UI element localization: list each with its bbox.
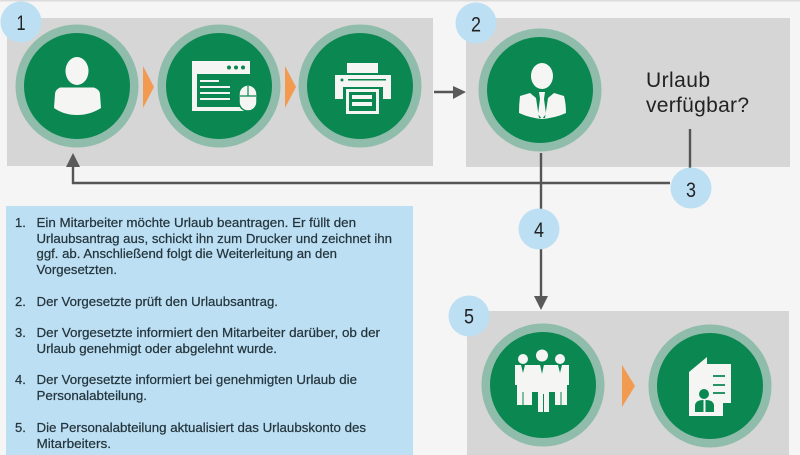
badge 2 <box>456 2 496 44</box>
text block: numbered steps: Der Vorgesetzte informiert den Mitarbeiter darüber, ob der <box>36 325 381 340</box>
badge 1 <box>0 2 42 42</box>
text block: numbered steps: Der Vorgesetzte prüft den Urlaubsantrag. <box>36 294 278 309</box>
connector: question to badge 3 <box>689 129 691 170</box>
text block: numbered steps <box>15 215 392 451</box>
icon: printer <box>298 24 422 148</box>
panel: step 2 background <box>466 18 790 167</box>
panel: description list background <box>6 206 413 455</box>
connector: supervisor to badge 4 <box>540 153 542 210</box>
arrow: feedback from step 3 to step 1 <box>66 153 670 183</box>
text block: numbered steps: Ein Mitarbeiter möchte Urlaub beantragen. Er füllt den <box>36 215 356 230</box>
badge 3: 3 <box>686 179 696 202</box>
text block: numbered steps: Vorgesetzten. <box>36 262 117 277</box>
badge 2: 2 <box>471 14 481 36</box>
text block: numbered steps: Personalabteilung. <box>36 388 147 403</box>
text block: numbered steps: Urlaubsantrag aus, schickt ihn zum Drucker und zeichnet ihn <box>36 231 392 246</box>
question text <box>646 69 749 117</box>
icon: staff group <box>482 324 604 446</box>
text block: numbered steps: 2. <box>15 294 26 309</box>
icon: employee <box>16 24 138 148</box>
arrow: badge 4 to step 5 <box>534 248 548 310</box>
text block: numbered steps: Urlaub genehmigt oder abgelehnt wurde. <box>36 341 277 356</box>
question text: Urlaub <box>646 69 710 92</box>
icon: form on screen with mouse <box>158 24 280 148</box>
arrow: staff to personnel file <box>622 365 635 407</box>
badge 5: 5 <box>464 306 474 328</box>
panel: step 1 background <box>7 18 433 166</box>
badge 1: 1 <box>16 12 26 35</box>
badge 4 <box>518 208 560 250</box>
arrow: employee to form <box>143 66 154 108</box>
question text: verfügbar? <box>646 94 749 117</box>
text block: numbered steps: ggf. ab. Anschließend folgt die Weiterleitung an den <box>36 246 337 261</box>
icon: supervisor <box>478 28 602 152</box>
badge 4: 4 <box>534 219 544 242</box>
arrow: form to printer <box>285 66 296 108</box>
text block: numbered steps: 4. <box>15 372 26 387</box>
text block: numbered steps: 1. <box>15 215 26 230</box>
panel: step 5 background <box>467 311 789 455</box>
text block: numbered steps: Die Personalabteilung aktualisiert das Urlaubskonto des <box>36 420 367 435</box>
badge 3 <box>670 168 712 208</box>
text block: numbered steps: 5. <box>15 420 26 435</box>
badge 5 <box>448 296 490 336</box>
text block: numbered steps: Mitarbeiters. <box>36 436 111 451</box>
text block: numbered steps: Der Vorgesetzte informiert bei genehmigten Urlaub die <box>36 372 357 387</box>
icon: personnel file <box>648 324 772 448</box>
text block: numbered steps: 3. <box>15 325 26 340</box>
arrow: step 1 to step 2 <box>434 86 466 99</box>
